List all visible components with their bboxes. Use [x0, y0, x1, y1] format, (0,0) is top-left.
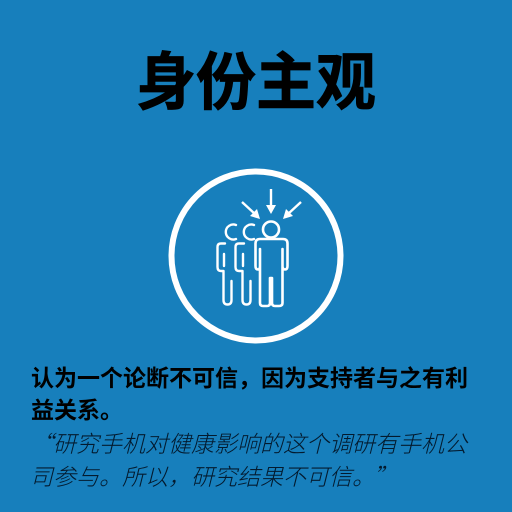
example quote: “研究手机对健康影响的这个调研有手机公 — [30, 425, 467, 459]
front figure — [256, 222, 288, 306]
back figures — [218, 224, 254, 304]
title: 身份主观 — [136, 48, 376, 117]
example quote — [30, 425, 468, 492]
arrows pointing at front figure — [242, 189, 301, 219]
claim text: 认为一个论断不可信，因为支持者与之有利 — [31, 365, 468, 391]
example quote: 司参与。所以，研究结果不可信。 ” — [30, 458, 396, 492]
icon: people with arrows in circle — [168, 168, 344, 344]
claim text: 益关系。 — [31, 397, 123, 423]
icon ring — [172, 172, 340, 340]
claim text — [31, 365, 468, 423]
